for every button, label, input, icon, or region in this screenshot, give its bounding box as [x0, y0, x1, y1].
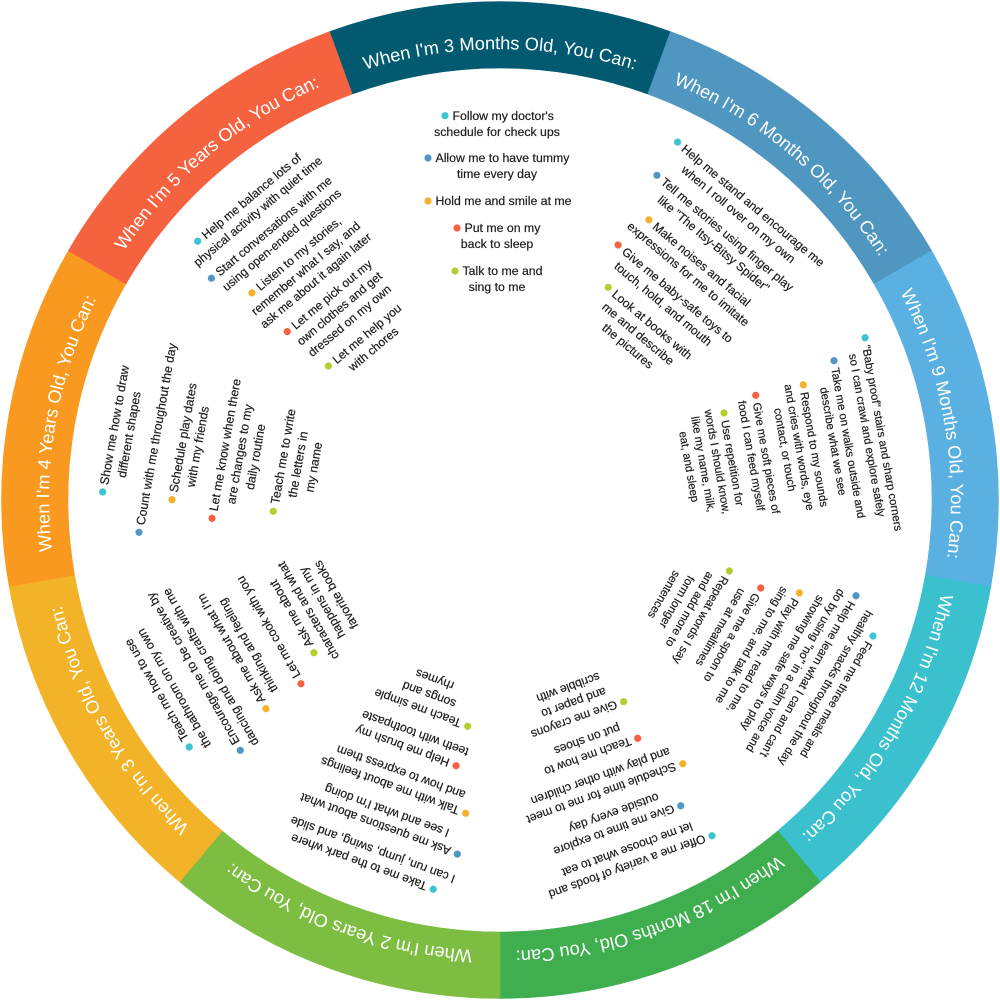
item: shapes: different shapes [115, 390, 144, 479]
item: hold and smile: Hold me and smile at me [436, 194, 572, 208]
item: foods: let me choose what to eat [559, 819, 694, 880]
item: letters: the letters in [285, 430, 311, 499]
band segment: 18 months [479, 823, 831, 1000]
item: routine: are changes to my [224, 402, 256, 505]
item: talk and sing [451, 264, 543, 294]
item: crayons: scribble with [535, 670, 602, 706]
panel: 4 years [1, 250, 325, 587]
item: soft food [734, 391, 781, 518]
item: stories: ask me about it again later [257, 230, 374, 331]
item: park: Take me to the park where [289, 831, 429, 893]
item: feelings: and how to express them [335, 742, 467, 802]
item: chores [321, 301, 414, 386]
item: play: sing to me, and talk to me [712, 584, 790, 706]
item: toys: touch, hold, and mouth [612, 259, 715, 349]
item: shapes: Show me how to draw [97, 364, 132, 486]
item: foods: Offer me a variety of foods and [547, 831, 707, 901]
item: soft food: Give me soft pieces of [750, 402, 781, 516]
item: back to sleep [453, 221, 541, 251]
item: walks: Take me on walks outside and [828, 367, 867, 519]
item: routine: Let me know when there [207, 378, 244, 512]
item: spoon: use at mealtimes [693, 586, 748, 669]
panel: 9 months [676, 250, 999, 587]
item: brush teeth: Help me brush my [353, 722, 451, 769]
item: favorite books [260, 543, 370, 670]
panel: 3 years [8, 558, 361, 882]
heading: 3 years: When I'm 3 Years Old, You Can: [52, 607, 187, 836]
item: routine [205, 378, 275, 529]
item: stories [237, 206, 374, 331]
item: check ups: Follow my doctor's [452, 109, 554, 123]
item: conversations: using open-ended questions [220, 186, 344, 294]
item: chores: with chores [345, 324, 401, 375]
item: thinking: thinking and feeling [216, 596, 281, 695]
item: talk and sing: sing to me [469, 280, 526, 294]
item: repeat words: form longer [656, 573, 697, 631]
band segment: 3 years [0, 555, 234, 897]
item: crayons: Give me crayons [529, 697, 619, 742]
item: books: Look at books with [609, 287, 695, 362]
item: toys: Give me baby-safe toys to [619, 245, 736, 346]
item: check ups [434, 109, 560, 139]
item: shoes: put on shoes [552, 721, 622, 758]
item: repetition [673, 405, 746, 520]
item: repeat words: Repeat words I say [670, 574, 731, 666]
item: spoon [688, 574, 768, 684]
heading: 4 years: When I'm 4 Years Old, You Can: [36, 296, 96, 552]
heading: 6 months: When I'm 6 Months Old, You Can: [676, 72, 887, 256]
heading: 2 years: When I'm 2 Years Old, You Can: [228, 864, 472, 963]
item: clothes: dressed on my own [305, 282, 394, 360]
item: chores: Let me help you [330, 301, 404, 367]
item: songs: Teach me simple [372, 686, 463, 730]
band segment: 5 years [49, 9, 370, 299]
item: explore: Give me time to explore [551, 802, 676, 858]
item: respond: Respond to my sounds [797, 391, 830, 508]
band segment: 2 years [169, 823, 521, 1000]
item: learn no: do by using "no" in a calm voice and [743, 587, 847, 754]
item: stories: Listen to my stories, [253, 214, 344, 294]
item: baby proof: so I can crawl and explore safely [846, 353, 887, 518]
item: play dates: with my friends [184, 405, 212, 489]
item: routine: daily routine [243, 423, 268, 491]
item: favorite books: happens in my [296, 564, 348, 641]
item: thinking [194, 583, 288, 715]
item: shapes [95, 364, 148, 500]
item: park: I can run, jump, swing, and slide [288, 813, 457, 886]
item: stand: when I roll over on my own [678, 162, 798, 266]
item: check ups: schedule for check ups [434, 125, 560, 139]
item: letters [266, 408, 330, 522]
item: baby proof [843, 333, 904, 535]
item: stand: Help me stand and encourage me [679, 142, 827, 270]
item: noises: Make noises and facial [650, 220, 753, 309]
item: letters: my name [303, 441, 325, 493]
heading: 9 months: When I'm 9 Months Old, You Can: [902, 287, 964, 558]
item: favorite books: Ask me about [266, 577, 316, 650]
item: soft food: food I can feed myself [735, 400, 766, 513]
item: shoes [537, 715, 643, 779]
item: bathroom: Teach me how to use [121, 636, 192, 744]
panel: 18 months [500, 670, 821, 999]
item: repetition: words I should know, [701, 408, 732, 515]
item: meals: healthy snacks throughout the day [775, 608, 875, 768]
panel: 3 months [330, 1, 670, 294]
item: stories: remember what I say, and [248, 219, 363, 318]
item: creative: Encourage me to be creative by [143, 589, 243, 747]
item: walks [812, 356, 867, 522]
item: clothes: own clothes and get [294, 269, 385, 348]
band segment: 4 years [0, 246, 130, 597]
item: songs [372, 655, 485, 734]
item: baby proof: "Baby proof" stairs and sharp corners [859, 344, 904, 532]
item: brush teeth: teeth with toothpaste [360, 707, 470, 759]
item: favorite books: characters and what [274, 559, 342, 662]
item: tummy time: time every day [457, 167, 538, 181]
item: learn no: showing me safe ways to play [738, 593, 826, 733]
item: talk and sing: Talk to me and [462, 264, 543, 278]
panel: 2 years [179, 666, 500, 999]
item: conversations: Start conversations with me [213, 173, 335, 279]
item: repeat words: sentences [645, 568, 683, 621]
item: learn no: Help me learn what I can and can't [757, 598, 857, 760]
item: spoon: Give me a spoon to [701, 591, 762, 684]
item: back to sleep: Put me on my [464, 221, 541, 235]
heading: 12 months: When I'm 12 Months Old, You Can: [802, 596, 954, 842]
item: tummy time: Allow me to have tummy [436, 151, 570, 165]
item: explore [546, 783, 687, 858]
item: books: the pictures [599, 321, 656, 372]
band segment: 9 months [870, 246, 1000, 597]
item: walks: describe what we see [817, 386, 848, 496]
heading: 3 months: When I'm 3 Months Old, You Can: [362, 36, 636, 70]
item: tummy time [424, 151, 570, 181]
item: creative: dancing and doing crafts with me [160, 586, 262, 748]
band segment: 3 months [330, 2, 670, 94]
item: repetition: like my name, milk, [688, 416, 717, 513]
item: explore: outside every day [566, 790, 661, 836]
item: repetition: eat, and sleep [676, 431, 700, 503]
item: play dates: Schedule play dates [167, 382, 200, 493]
panel: 5 years [68, 31, 404, 375]
item: clothes [280, 257, 395, 364]
item: songs: songs and [400, 679, 458, 711]
item: noises: expressions for me to imitate [625, 219, 752, 329]
item: respond: and cries with words, eye [781, 383, 815, 511]
item: bathroom: the bathroom on my own [134, 626, 214, 750]
band segment: 12 months [766, 555, 1000, 897]
item: respond [767, 380, 830, 514]
item: stories: like "The Itsy-Bitsy Spider" [655, 193, 772, 295]
item: books [580, 280, 695, 387]
heading: 18 months: When I'm 18 Months Old, You Can: [517, 858, 786, 961]
item: questions: I see and what I'm doing [323, 782, 451, 840]
item: books: me and describe [599, 300, 677, 368]
item: crayons [518, 664, 629, 742]
item: thinking: Ask me about what I'm [194, 591, 268, 706]
band segment: 6 months [630, 9, 951, 299]
panel: 12 months [645, 567, 992, 882]
item: songs: rhymes [414, 666, 456, 693]
item: repetition: Use repetition for [718, 419, 745, 507]
heading: 5 years: When I'm 5 Years Old, You Can: [114, 78, 319, 248]
item: crayons: and paper to [539, 684, 608, 721]
item: play dates [165, 382, 215, 507]
item: feelings [319, 739, 477, 821]
item: favorite books: favorite books [311, 558, 361, 631]
item: questions: Ask me questions about what [298, 790, 453, 858]
item: play: Play with me, read to me, [724, 596, 801, 715]
item: cook: Let me cook with you [234, 573, 303, 681]
panel: 6 months [599, 31, 932, 372]
item: balance activity: physical activity with quiet time [191, 153, 325, 269]
item: meals: Feed me three meals and [797, 639, 874, 760]
item: back to sleep: back to sleep [461, 237, 533, 251]
item: balance activity: Help me balance lots of [199, 150, 305, 242]
item: clothes: Let me pick out my [289, 257, 375, 332]
item: repeat words [631, 542, 736, 666]
item: respond: contact, or touch [771, 407, 797, 492]
item: count: Count with me throughout the day [134, 341, 180, 526]
item: shoes: Teach me how to [542, 734, 633, 779]
item: other children: and play with other children [529, 745, 672, 808]
item: stories: Tell me stories using finger play [658, 175, 797, 295]
item: letters: Teach me to write [268, 408, 299, 505]
item: repeat words: and add more to [663, 570, 716, 649]
item: other children: Schedule time for me to meet [524, 759, 678, 827]
item: feelings: Talk with me about feelings [319, 754, 461, 817]
